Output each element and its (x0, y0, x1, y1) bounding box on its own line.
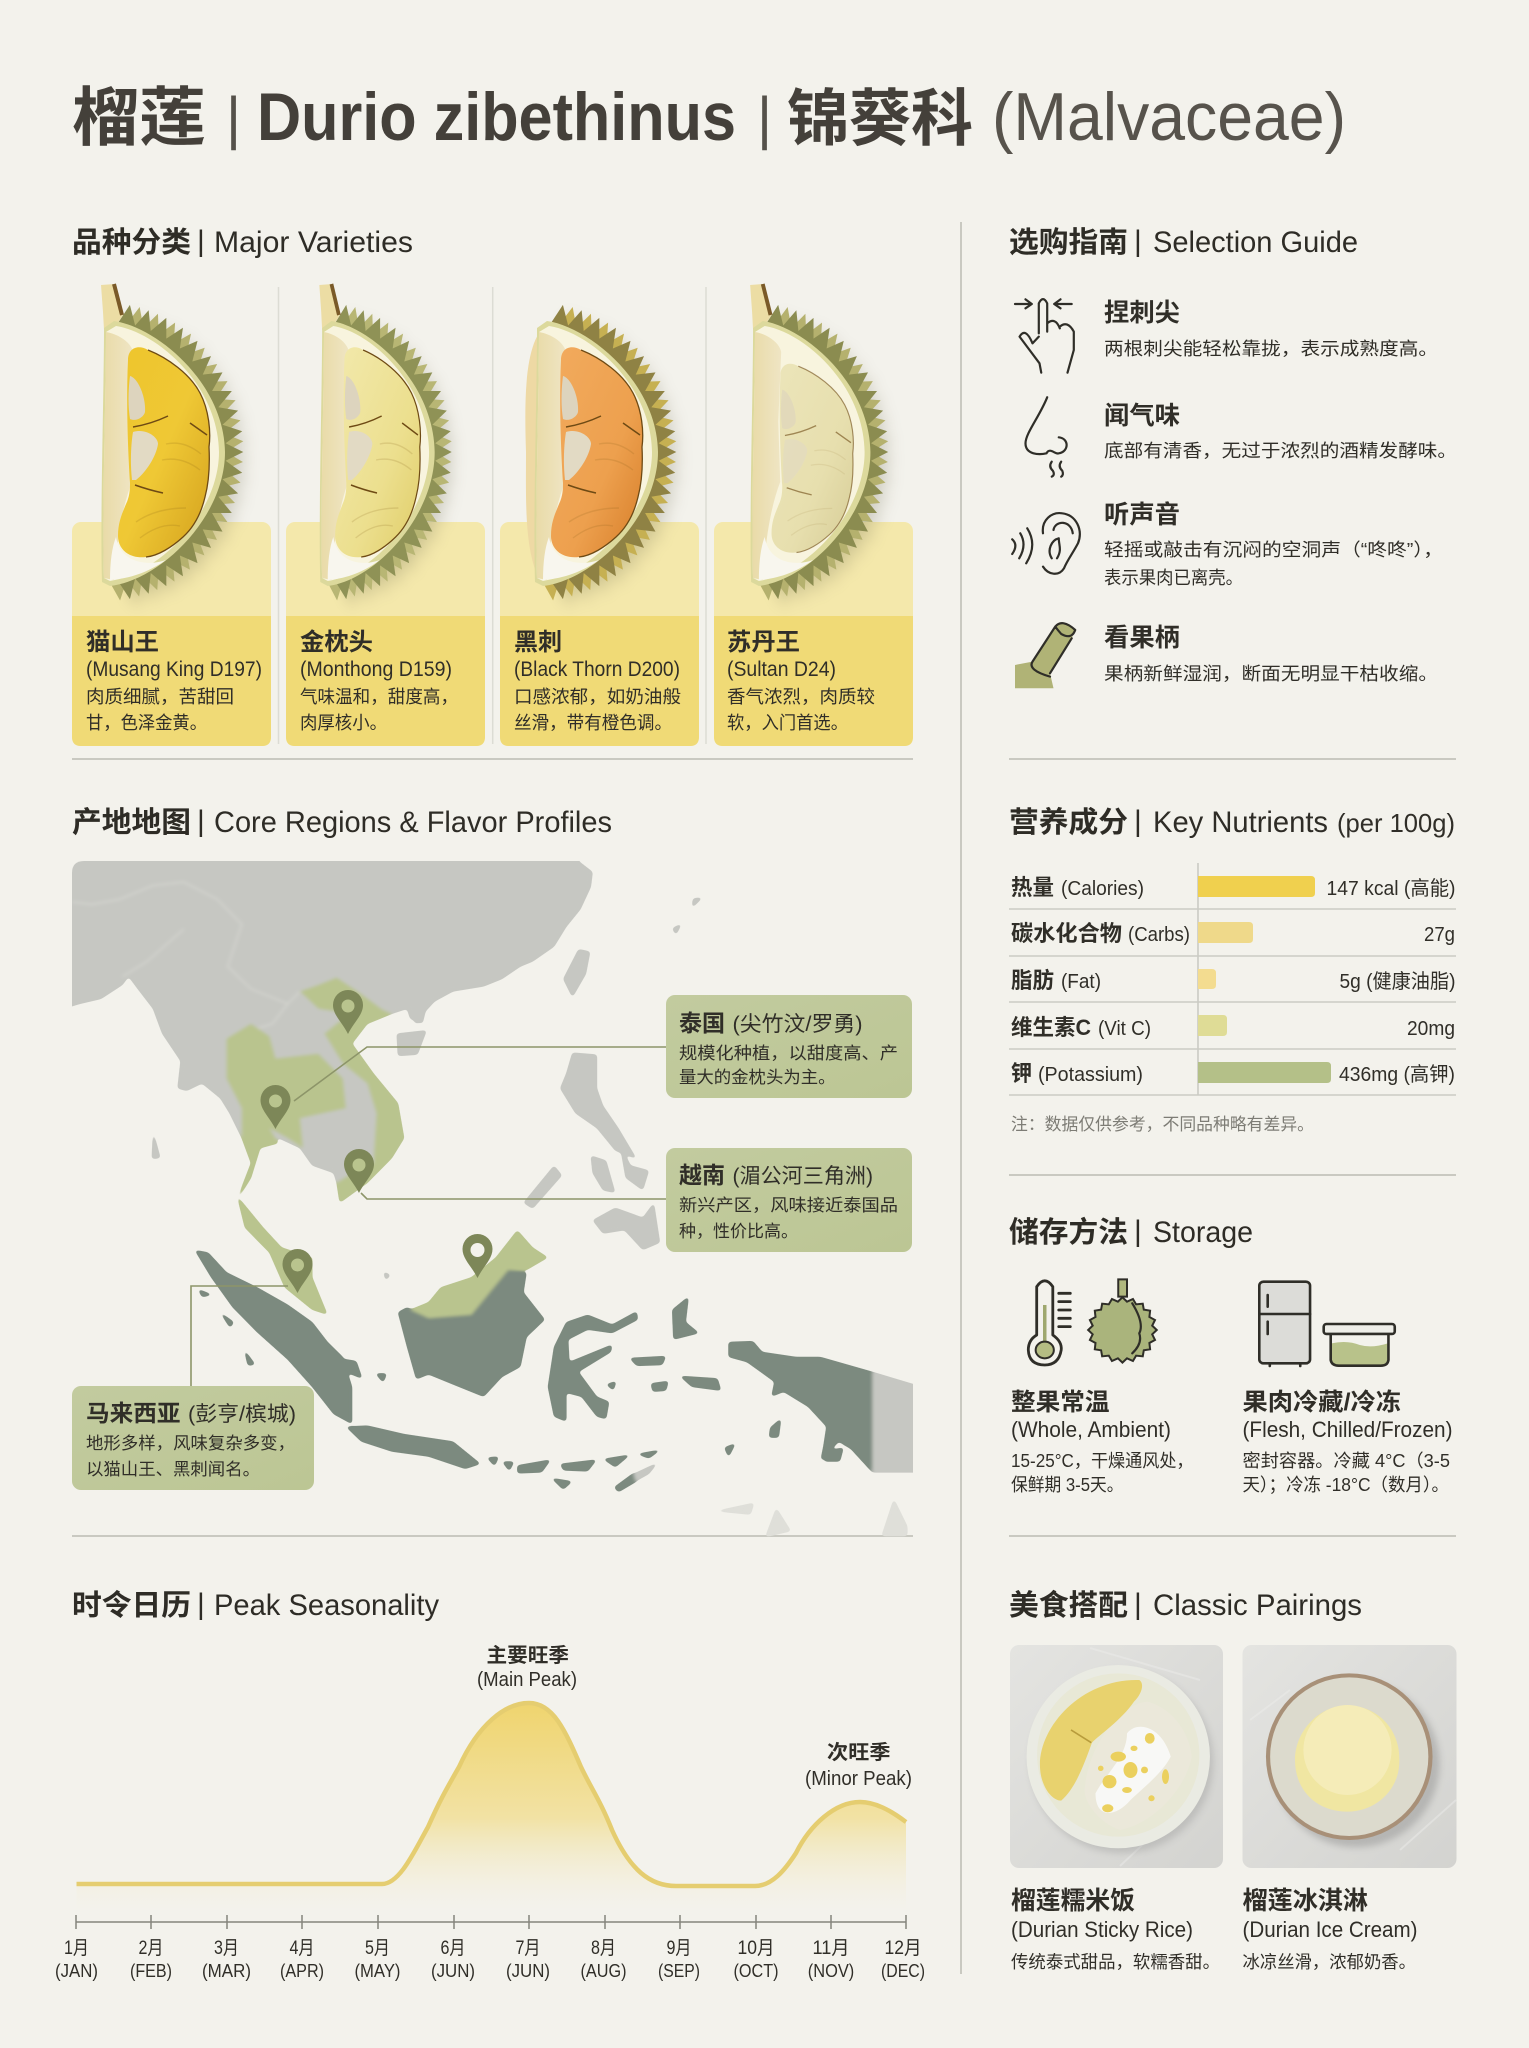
row: carbs: (Carbs) (1128, 924, 1190, 946)
item: smell: 闻气味 (1104, 402, 1180, 430)
callout: Malaysia (72, 1386, 314, 1490)
month axis: (MAR) (202, 1961, 251, 1981)
area chart: season curve (76, 1703, 906, 1912)
item: flesh chilled: 天）；冷冻 -18°C（数月）。 (1242, 1475, 1449, 1495)
heading: varieties: 品种分类 (72, 226, 191, 259)
heading: varieties (72, 225, 413, 259)
heading: nutrients: | (1134, 805, 1142, 838)
card: Musang King (72, 284, 271, 746)
item: spikes: 捏刺尖 (1104, 299, 1180, 327)
row: calories (1011, 875, 1456, 900)
item: smell (1104, 402, 1457, 461)
month axis: 10月 (738, 1938, 774, 1959)
card: Sultan: 软，入门首选。 (727, 713, 848, 733)
card: Monthong: 金枕头 (300, 628, 373, 656)
callout: Thailand: (尖竹汶/罗勇) (732, 1013, 862, 1036)
icon: ear (1012, 513, 1080, 574)
label: minor peak: (Minor Peak) (805, 1768, 912, 1790)
callout: Vietnam: (湄公河三角洲) (732, 1165, 873, 1188)
heading: nutrients (1009, 805, 1455, 839)
row: potassium: (Potassium) (1038, 1064, 1143, 1086)
row: vitamin C: 20mg (1407, 1018, 1455, 1040)
heading: seasonality: Peak Seasonality (214, 1589, 439, 1622)
mainland asia (grey) (55, 845, 593, 1203)
Maluku islands (198, 1289, 844, 1461)
item: spikes (1104, 299, 1438, 359)
card: Black Thorn: (Black Thorn D200) (514, 658, 680, 681)
item: flesh chilled: (Flesh, Chilled/Frozen) (1242, 1417, 1452, 1442)
card: Monthong (286, 284, 485, 746)
card: Sultan: 香气浓烈，肉质较 (727, 687, 875, 707)
item: sound: 表示果肉已离壳。 (1104, 568, 1243, 588)
heading: varieties: | (197, 225, 205, 258)
month axis: (JAN) (55, 1961, 98, 1981)
heading: selection guide: | (1134, 225, 1142, 258)
Sumatra (195, 1250, 352, 1424)
heading: pairings (1009, 1588, 1362, 1622)
item: stalk: 看果柄 (1104, 624, 1180, 652)
heading: map: | (197, 805, 205, 838)
month axis: 4月 (290, 1938, 314, 1959)
card: Black Thorn: 丝滑，带有橙色调。 (514, 713, 672, 733)
callout: Malaysia: 以猫山王、黑刺闻名。 (86, 1460, 260, 1479)
card: Musang King: 猫山王 (86, 629, 159, 656)
durian: Sultan (750, 284, 897, 609)
item: whole ambient: 15-25°C，干燥通风处， (1011, 1451, 1194, 1471)
heading: map: 产地地图 (72, 806, 191, 839)
heading: pairings: | (1134, 1588, 1142, 1621)
row: vitamin C: 维生素C (1011, 1015, 1091, 1040)
pin: Malaysia peninsula (282, 1249, 312, 1293)
heading: selection guide: Selection Guide (1153, 226, 1358, 259)
row: calories: 147 kcal (高能) (1326, 877, 1456, 900)
item: sound (1104, 501, 1443, 588)
image: durian ice cream (1242, 1645, 1456, 1868)
callout: Vietnam: 新兴产区，风味接近泰国品 (679, 1196, 898, 1215)
card: Monthong: 气味温和，甜度高， (300, 687, 458, 707)
heading: storage: Storage (1153, 1216, 1253, 1249)
panel: seasonality (55, 1588, 925, 1981)
callout: Malaysia: 马来西亚 (86, 1400, 180, 1426)
item: whole ambient: (Whole, Ambient) (1011, 1417, 1171, 1442)
heading: storage: 储存方法 (1009, 1216, 1128, 1249)
row: carbs: 27g (1424, 924, 1455, 946)
month axis: (NOV) (808, 1961, 854, 1981)
month axis (55, 1915, 925, 1981)
row: vitamin C: (Vit C) (1098, 1018, 1151, 1040)
icon: fridge and container (1259, 1282, 1395, 1366)
month axis: 8月 (591, 1938, 616, 1959)
row: carbs: 碳水化合物 (1011, 921, 1122, 946)
Thailand and Malaysia (green) (227, 1024, 346, 1315)
card: Sultan (714, 284, 913, 746)
item: sticky rice: 传统泰式甜品，软糯香甜。 (1011, 1952, 1220, 1972)
month axis: 7月 (516, 1938, 540, 1959)
durian: Monthong (319, 284, 460, 609)
pin: Vietnam south (344, 1149, 374, 1193)
month axis: 3月 (214, 1938, 239, 1959)
month axis: (DEC) (881, 1961, 925, 1981)
pin: Vietnam north (333, 990, 363, 1034)
pin: Thailand (260, 1085, 290, 1129)
item: flesh chilled (1242, 1389, 1452, 1495)
row: potassium (1011, 1061, 1455, 1086)
month axis: (OCT) (734, 1961, 778, 1981)
title: 锦葵科 (787, 85, 973, 154)
item: flesh chilled: 果肉冷藏/冷冻 (1242, 1389, 1401, 1416)
row: potassium: 钾 (1011, 1061, 1032, 1086)
Vietnam (green) (300, 977, 404, 1203)
item: whole ambient (1011, 1389, 1194, 1495)
callout: Thailand: 规模化种植，以甜度高、产 (679, 1044, 898, 1063)
callout: Thailand: 泰国 (679, 1010, 725, 1036)
month axis: 9月 (666, 1938, 692, 1959)
card: Sultan: 苏丹王 (727, 629, 800, 656)
item: whole ambient: 保鲜期 3-5天。 (1011, 1475, 1124, 1495)
item: ice cream: 榴莲冰淇淋 (1242, 1887, 1368, 1915)
card: Musang King: (Musang King D197) (86, 658, 262, 681)
note: 注：数据仅供参考，不同品种略有差异。 (1011, 1115, 1314, 1134)
card: Monthong: 肉厚核小。 (300, 713, 387, 733)
month axis: (MAY) (354, 1961, 400, 1981)
month axis: (JUN) (431, 1961, 475, 1981)
Borneo (398, 1270, 545, 1397)
icon: pinching hand (1015, 299, 1074, 373)
title: (Malvaceae) (992, 79, 1346, 155)
card: Black Thorn: 黑刺 (514, 629, 562, 656)
item: sound: 听声音 (1104, 501, 1180, 529)
row: fat: 脂肪 (1011, 968, 1054, 993)
title: | (226, 86, 241, 151)
month axis: 1月 (64, 1938, 89, 1959)
row: carbs (1011, 921, 1455, 946)
title: Durio zibethinus (257, 79, 736, 155)
callout: Vietnam (666, 1148, 912, 1252)
callout: Vietnam: 种，性价比高。 (679, 1222, 798, 1241)
map of Southeast Asia (55, 845, 931, 1537)
heading: seasonality (72, 1588, 439, 1622)
panel: pairings (1009, 1588, 1456, 1972)
label: main peak (477, 1644, 577, 1691)
label: minor peak (805, 1741, 912, 1790)
panel: nutrients (1009, 805, 1456, 1134)
Sarawak and Sabah (green) (410, 1230, 548, 1318)
icon: thermometer and whole durian (1028, 1279, 1157, 1365)
item: flesh chilled: 密封容器。冷藏 4°C（3-5 (1242, 1451, 1450, 1471)
item: smell: 底部有清香，无过于浓烈的酒精发酵味。 (1104, 441, 1457, 461)
leader line: Vietnam (361, 1193, 666, 1199)
callout: Malaysia: (彭亨/槟城) (188, 1403, 296, 1426)
month axis: (SEP) (658, 1961, 700, 1981)
card: Black Thorn: 口感浓郁，如奶油般 (514, 687, 681, 707)
heading: selection guide (1009, 225, 1358, 259)
month axis: (JUN) (506, 1961, 550, 1981)
item: spikes: 两根刺尖能轻松靠拢，表示成熟度高。 (1104, 339, 1438, 359)
label: main peak: (Main Peak) (477, 1669, 577, 1691)
row: fat: (Fat) (1061, 971, 1101, 993)
item: sound: 轻摇或敲击有沉闷的空洞声（“咚咚”）， (1104, 540, 1443, 560)
month axis: 2月 (138, 1938, 164, 1959)
heading: map (72, 805, 612, 839)
row: fat (1011, 968, 1456, 993)
row: vitamin C (1011, 1015, 1455, 1040)
heading: varieties: Major Varieties (214, 226, 413, 259)
heading: map: Core Regions & Flavor Profiles (214, 806, 612, 839)
card: Monthong: (Monthong D159) (300, 658, 452, 681)
image: durian sticky rice (1010, 1645, 1223, 1868)
item: ice cream: (Durian Ice Cream) (1242, 1917, 1418, 1942)
Sulawesi (548, 1311, 638, 1422)
heading: storage: | (1134, 1215, 1142, 1248)
heading: seasonality: | (197, 1588, 205, 1621)
table rules (1009, 863, 1456, 1095)
callout: Vietnam: 越南 (679, 1162, 725, 1188)
card: Musang King: 甘，色泽金黄。 (86, 713, 207, 733)
row: calories: 热量 (1011, 875, 1054, 900)
callout: Malaysia: 地形多样，风味复杂多变， (86, 1434, 295, 1453)
New Guinea (729, 1341, 872, 1472)
card: Musang King: 肉质细腻，苦甜回 (86, 687, 234, 707)
month axis: (APR) (280, 1961, 324, 1981)
card: Sultan: (Sultan D24) (727, 658, 836, 681)
durian: Black Thorn (525, 305, 686, 609)
row: fat: 5g (健康油脂) (1340, 970, 1456, 993)
item: ice cream: 冰凉丝滑，浓郁奶香。 (1242, 1952, 1416, 1972)
heading: selection guide: 选购指南 (1009, 226, 1128, 259)
row: calories: (Calories) (1061, 878, 1144, 900)
month axis: 12月 (884, 1938, 922, 1959)
title: 榴莲 (72, 82, 206, 154)
label: main peak: 主要旺季 (486, 1644, 569, 1667)
label: minor peak: 次旺季 (827, 1741, 890, 1764)
heading: storage (1009, 1215, 1253, 1249)
title: | (757, 86, 772, 151)
item: ice cream (1242, 1887, 1418, 1972)
durian: Musang King (101, 284, 253, 609)
item: sticky rice: 榴莲糯米饭 (1011, 1887, 1135, 1915)
title (72, 79, 1346, 155)
callout: Thailand (666, 995, 912, 1098)
item: stalk: 果柄新鲜湿润，断面无明显干枯收缩。 (1104, 664, 1438, 684)
item: stalk (1104, 624, 1438, 684)
panel: varieties (72, 225, 913, 746)
heading: nutrients: 营养成分 (1009, 806, 1128, 839)
heading: nutrients: (per 100g) (1337, 808, 1455, 838)
panel: map (55, 805, 931, 1537)
Taiwan and Hainan (397, 949, 590, 1056)
month axis: (AUG) (580, 1961, 626, 1981)
item: sticky rice: (Durian Sticky Rice) (1011, 1917, 1193, 1942)
item: sticky rice (1011, 1887, 1220, 1972)
row: potassium: 436mg (高钾) (1339, 1063, 1455, 1086)
panel: storage (1009, 1215, 1452, 1495)
month axis: (FEB) (130, 1961, 172, 1981)
icon: nose (1026, 397, 1067, 477)
card: Black Thorn (500, 305, 699, 746)
heading: seasonality: 时令日历 (72, 1589, 191, 1622)
panel: selection guide (1009, 225, 1457, 688)
heading: pairings: Classic Pairings (1153, 1589, 1362, 1622)
icon: stem (1015, 623, 1075, 688)
Philippines (grey) (523, 1053, 660, 1250)
heading: pairings: 美食搭配 (1009, 1589, 1128, 1622)
leader line: Thailand (294, 1047, 666, 1101)
Java and Lesser Sunda (346, 1426, 661, 1492)
callout: Thailand: 量大的金枕头为主。 (679, 1068, 836, 1087)
item: whole ambient: 整果常温 (1011, 1389, 1110, 1416)
heading: nutrients: Key Nutrients (1153, 806, 1328, 839)
month axis: 6月 (440, 1938, 466, 1959)
month axis: 5月 (365, 1938, 390, 1959)
month axis: 11月 (812, 1938, 850, 1959)
pin: Sarawak (462, 1234, 492, 1278)
leader line: Malaysia (191, 1286, 288, 1386)
